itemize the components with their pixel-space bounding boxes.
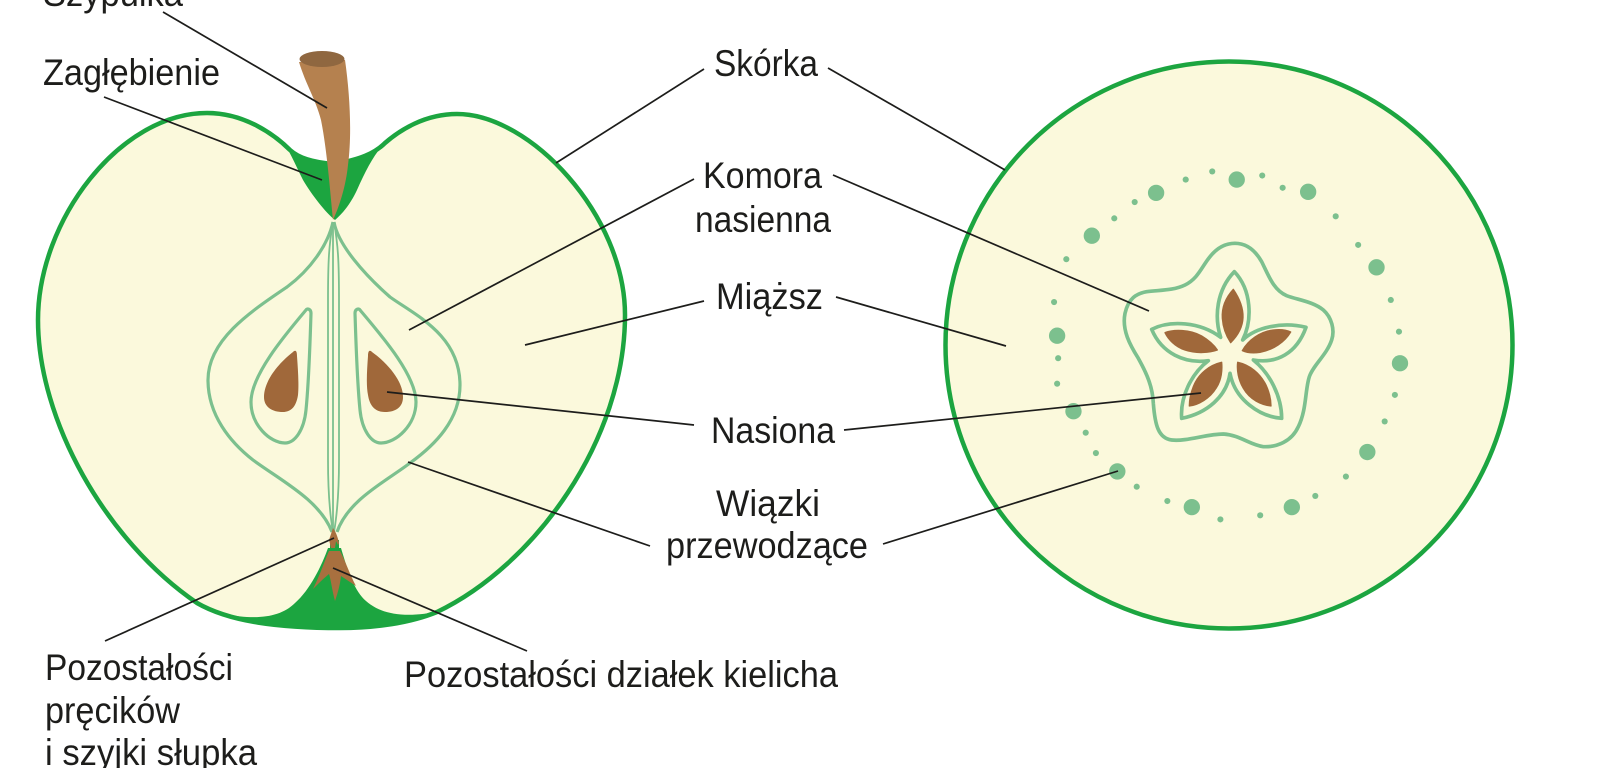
label: Skórka: Skórka — [714, 43, 818, 84]
right seed chamber — [355, 309, 416, 443]
label: Wiązki przewodzące: przewodzące — [666, 525, 868, 566]
seed chambers — [1152, 272, 1306, 418]
label: Pozostałości pręcików i szyjki słupka: pręcików — [45, 690, 180, 731]
stem — [299, 51, 350, 220]
left seed chamber — [251, 309, 311, 443]
label: Miąższ: Miąższ — [716, 276, 823, 317]
core — [1124, 243, 1333, 447]
left seed — [264, 351, 298, 412]
flesh and skin — [946, 62, 1512, 628]
label: Komora nasienna — [695, 155, 831, 240]
right seed — [367, 351, 403, 412]
apple cross section — [946, 62, 1512, 628]
label: Pozostałości działek kielicha: Pozostałości działek kielicha — [404, 654, 838, 695]
seeds — [1165, 289, 1291, 406]
label: Wiązki przewodzące — [666, 483, 868, 566]
sepal remnants — [313, 551, 356, 601]
label: Pozostałości pręcików i szyjki słupka: Pozostałości — [45, 647, 233, 688]
apple flesh and skin — [38, 113, 625, 628]
vascular bundle dots — [1049, 168, 1408, 522]
apple longitudinal section — [38, 51, 625, 628]
leader lines — [104, 12, 1201, 651]
label: Nasiona: Nasiona — [711, 410, 835, 451]
vascular bundles — [208, 222, 460, 532]
label: Wiązki przewodzące: Wiązki — [716, 483, 820, 524]
label: Komora nasienna: nasienna — [695, 199, 831, 240]
calyx base — [225, 548, 440, 628]
stamen and style remnants — [329, 528, 339, 552]
stem cavity — [283, 141, 382, 220]
label: Pozostałości pręcików i szyjki słupka — [45, 647, 257, 768]
label: Komora nasienna: Komora — [703, 155, 822, 196]
core outline — [1124, 243, 1333, 447]
label: Zagłębienie: Zagłębienie — [43, 52, 220, 93]
